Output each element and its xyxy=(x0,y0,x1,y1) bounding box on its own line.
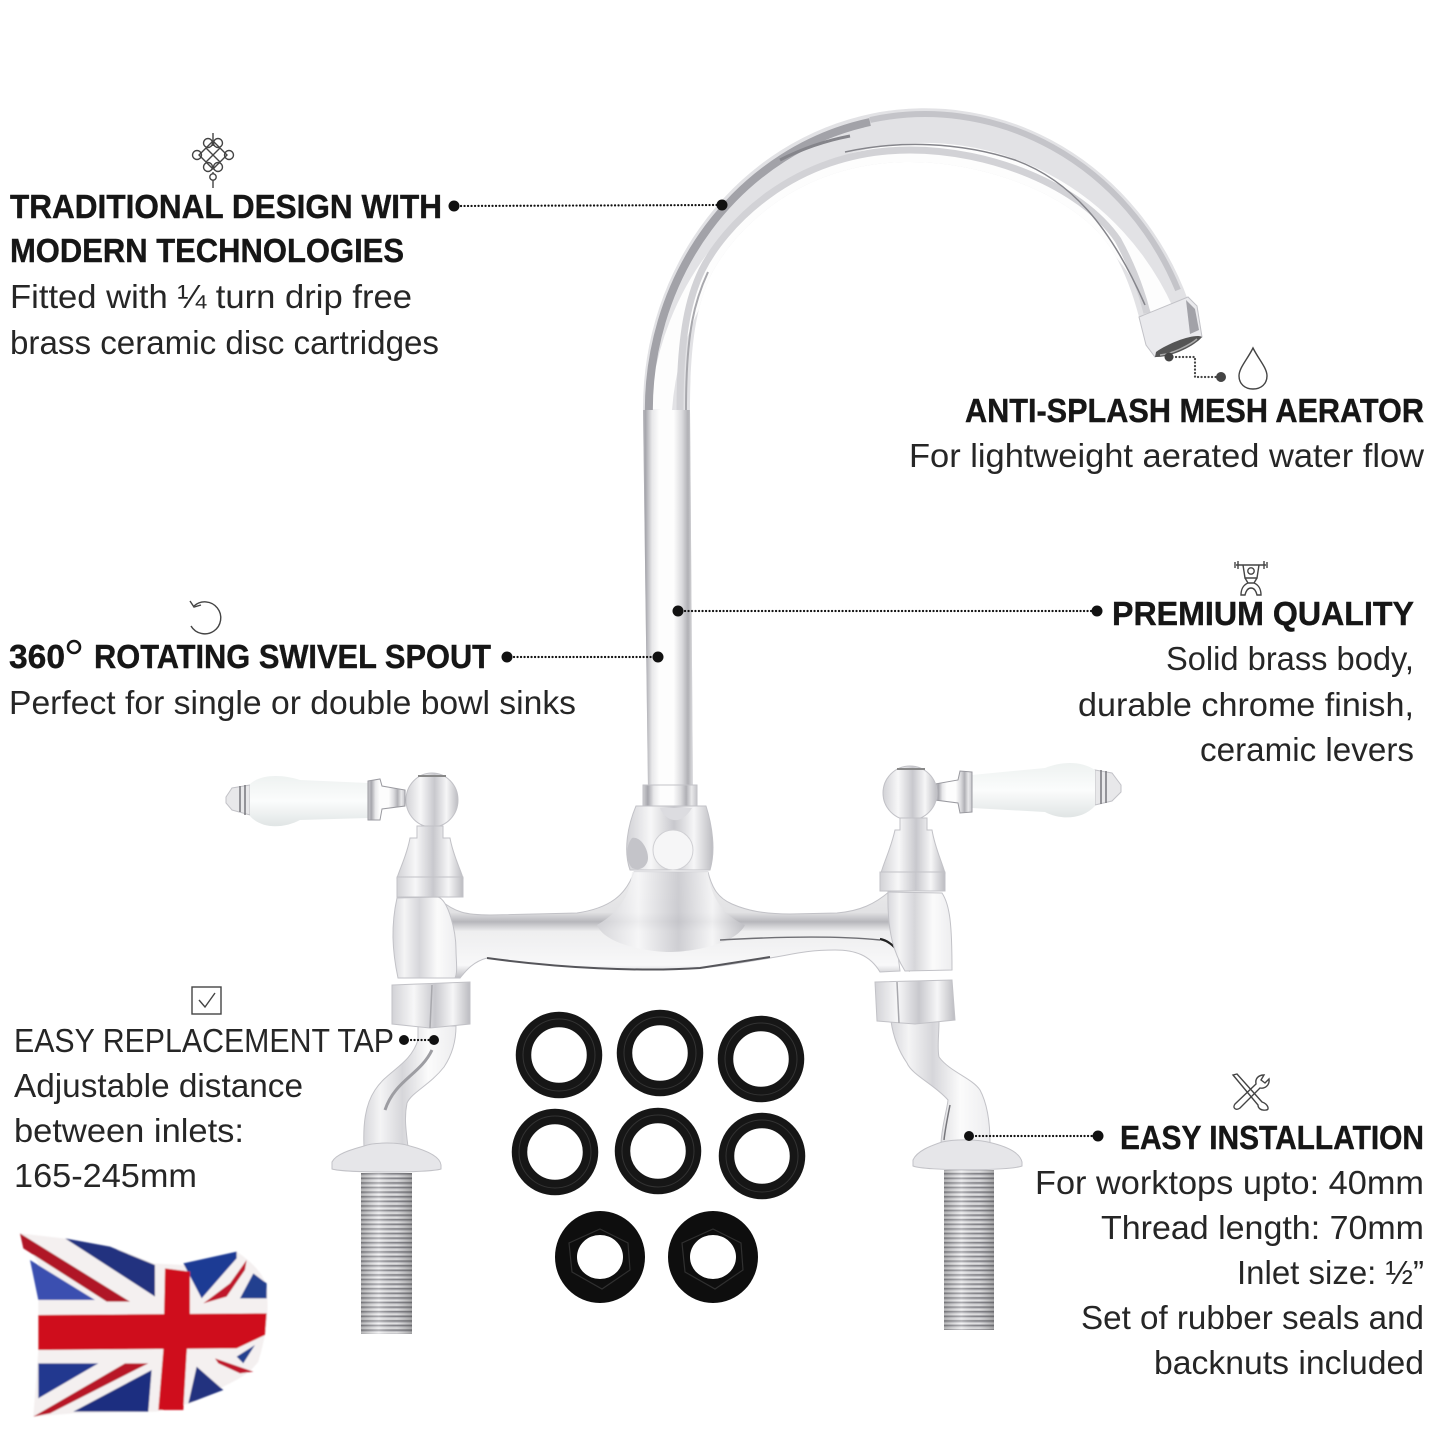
right inlet leg xyxy=(875,980,1022,1330)
backnut 1 xyxy=(555,1211,645,1303)
left inlet leg xyxy=(332,982,470,1334)
callout: easy replacement tap: Adjustable distance xyxy=(14,1067,303,1104)
callout: premium quality: ceramic levers xyxy=(1200,731,1414,768)
callout: aerator: For lightweight aerated water flow xyxy=(909,437,1424,474)
leader line: traditional design xyxy=(448,200,728,212)
callout: easy replacement tap: 165-245mm xyxy=(14,1157,197,1194)
icon: weightlifter xyxy=(1235,561,1267,595)
callout: premium quality: durable chrome finish, xyxy=(1078,686,1414,723)
callout: easy installation: backnuts included xyxy=(1154,1344,1424,1381)
icon: union jack flag xyxy=(20,1233,268,1417)
callout: aerator xyxy=(909,392,1424,474)
mixer tap illustration xyxy=(226,100,1202,1334)
rubber seal 1 xyxy=(523,1019,595,1091)
rubber seal 5 xyxy=(622,1115,694,1187)
rubber seal 4 xyxy=(519,1116,591,1188)
callout: premium quality: PREMIUM QUALITY xyxy=(1112,595,1414,632)
callout: easy installation: Inlet size: ½” xyxy=(1237,1254,1424,1291)
callout: easy installation xyxy=(1035,1119,1424,1381)
leader line: premium quality xyxy=(672,606,1102,616)
callout: traditional design: MODERN TECHNOLOGIES xyxy=(10,232,404,269)
callout: swivel spout xyxy=(9,638,576,721)
rubber seals and backnuts xyxy=(519,1017,798,1303)
icon: water drop xyxy=(1239,348,1267,389)
leader line: replacement tap xyxy=(399,1035,439,1045)
rubber seal 2 xyxy=(624,1017,696,1089)
callout: swivel spout: Perfect for single or double bowl sinks xyxy=(9,684,576,721)
rubber seal 3 xyxy=(725,1023,797,1095)
callout: premium quality xyxy=(1078,595,1414,768)
callout: traditional design: TRADITIONAL DESIGN WITH xyxy=(10,188,442,225)
bridge bar xyxy=(430,872,910,978)
callout: premium quality: Solid brass body, xyxy=(1166,640,1414,677)
leader line: aerator xyxy=(1164,352,1226,382)
rubber seal 6 xyxy=(726,1120,798,1192)
callout: easy installation: Thread length: 70mm xyxy=(1101,1209,1424,1246)
callout: easy replacement tap xyxy=(14,1022,394,1194)
icon: rotate arrow xyxy=(190,601,221,634)
left lever handle xyxy=(226,773,463,897)
callout: traditional design xyxy=(10,188,442,361)
leader line: installation xyxy=(964,1130,1104,1142)
callout: swivel spout: ROTATING SWIVEL SPOUT xyxy=(94,638,491,675)
right lever handle xyxy=(880,763,1121,891)
icon: checkbox xyxy=(192,987,221,1014)
right tap body xyxy=(888,892,952,971)
spout xyxy=(630,100,1200,800)
callout: traditional design: brass ceramic disc cartridges xyxy=(10,324,439,361)
aerator xyxy=(1139,297,1202,357)
callout: easy replacement tap: EASY REPLACEMENT TAP xyxy=(14,1022,394,1059)
backnut 2 xyxy=(668,1211,758,1303)
callout: traditional design: Fitted with ¼ turn drip free xyxy=(10,278,412,315)
callout: easy installation: Set of rubber seals and xyxy=(1081,1299,1424,1336)
icon: knot xyxy=(192,133,234,188)
callout: aerator: ANTI-SPLASH MESH AERATOR xyxy=(965,392,1424,429)
leader line: swivel spout xyxy=(502,652,664,662)
callout: easy installation: For worktops upto: 40mm xyxy=(1035,1164,1424,1201)
left tap body xyxy=(393,897,457,978)
central hub xyxy=(627,785,713,870)
icon: tools xyxy=(1233,1074,1269,1110)
callout: easy replacement tap: between inlets: xyxy=(14,1112,244,1149)
callout: swivel spout: 360 xyxy=(9,638,65,675)
